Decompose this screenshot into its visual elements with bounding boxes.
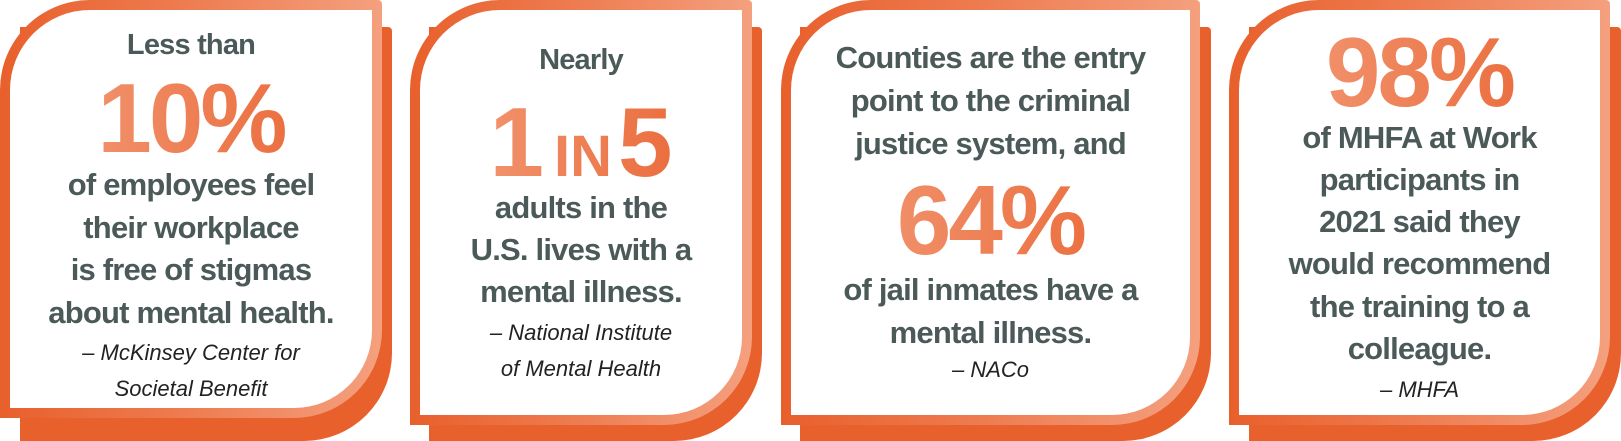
text block: description: of jail inmates have a xyxy=(843,272,1138,307)
text block: description: participants in xyxy=(1320,162,1519,197)
stat: 64% xyxy=(781,170,1200,270)
stat: 10%: 10% xyxy=(97,63,285,173)
panel: 1 in 5 adults xyxy=(410,0,762,441)
text block: description: of employees feel xyxy=(68,167,314,202)
text block: description: mental illness. xyxy=(480,274,682,309)
text block: description xyxy=(48,167,334,330)
text block: description: colleague. xyxy=(1348,331,1491,366)
panel: workplace stigma xyxy=(0,0,392,441)
source: NIMH: of Mental Health xyxy=(501,356,661,381)
text block: description: U.S. lives with a xyxy=(471,232,691,267)
source: NIMH xyxy=(490,320,672,381)
source: MHFA: – MHFA xyxy=(1380,377,1459,402)
panel: jail inmates xyxy=(781,0,1211,441)
text block: counties: justice system, and xyxy=(855,126,1126,161)
stat: 1 in 5 xyxy=(410,92,752,192)
text block: counties: Counties are the entry xyxy=(836,40,1145,75)
text block: description: would recommend xyxy=(1289,246,1550,281)
stat: 98% xyxy=(1229,22,1610,122)
text block: description: about mental health. xyxy=(48,295,334,330)
panel: MHFA recommend xyxy=(1229,0,1621,441)
stat: 98%: 98% xyxy=(1326,17,1513,127)
text block: description xyxy=(1288,120,1550,366)
text block: description xyxy=(843,272,1139,350)
text block: counties: point to the criminal xyxy=(851,83,1130,118)
heading: nearly: Nearly xyxy=(539,44,623,76)
source: NIMH: – National Institute xyxy=(490,320,672,345)
text block: description: of MHFA at Work xyxy=(1302,120,1537,155)
text block: description: their workplace xyxy=(83,210,299,245)
source: McKinsey: – McKinsey Center for xyxy=(82,340,300,365)
source: McKinsey xyxy=(82,340,301,401)
text block: description: mental illness. xyxy=(890,315,1091,350)
text block: description: adults in the xyxy=(495,190,667,225)
source: NACo: – NACo xyxy=(952,357,1029,382)
text block: description: 2021 said they xyxy=(1319,204,1520,239)
heading: less than: Less than xyxy=(127,29,255,61)
text block: description: is free of stigmas xyxy=(71,252,311,287)
stat: 10% xyxy=(0,68,382,168)
text block: counties xyxy=(836,40,1146,161)
text block: description xyxy=(471,190,692,309)
stat: 1 in 5: 1IN5 xyxy=(489,87,673,197)
text block: description: the training to a xyxy=(1310,289,1529,324)
stat: 64%: 64% xyxy=(897,165,1084,275)
source: McKinsey: Societal Benefit xyxy=(115,376,267,401)
